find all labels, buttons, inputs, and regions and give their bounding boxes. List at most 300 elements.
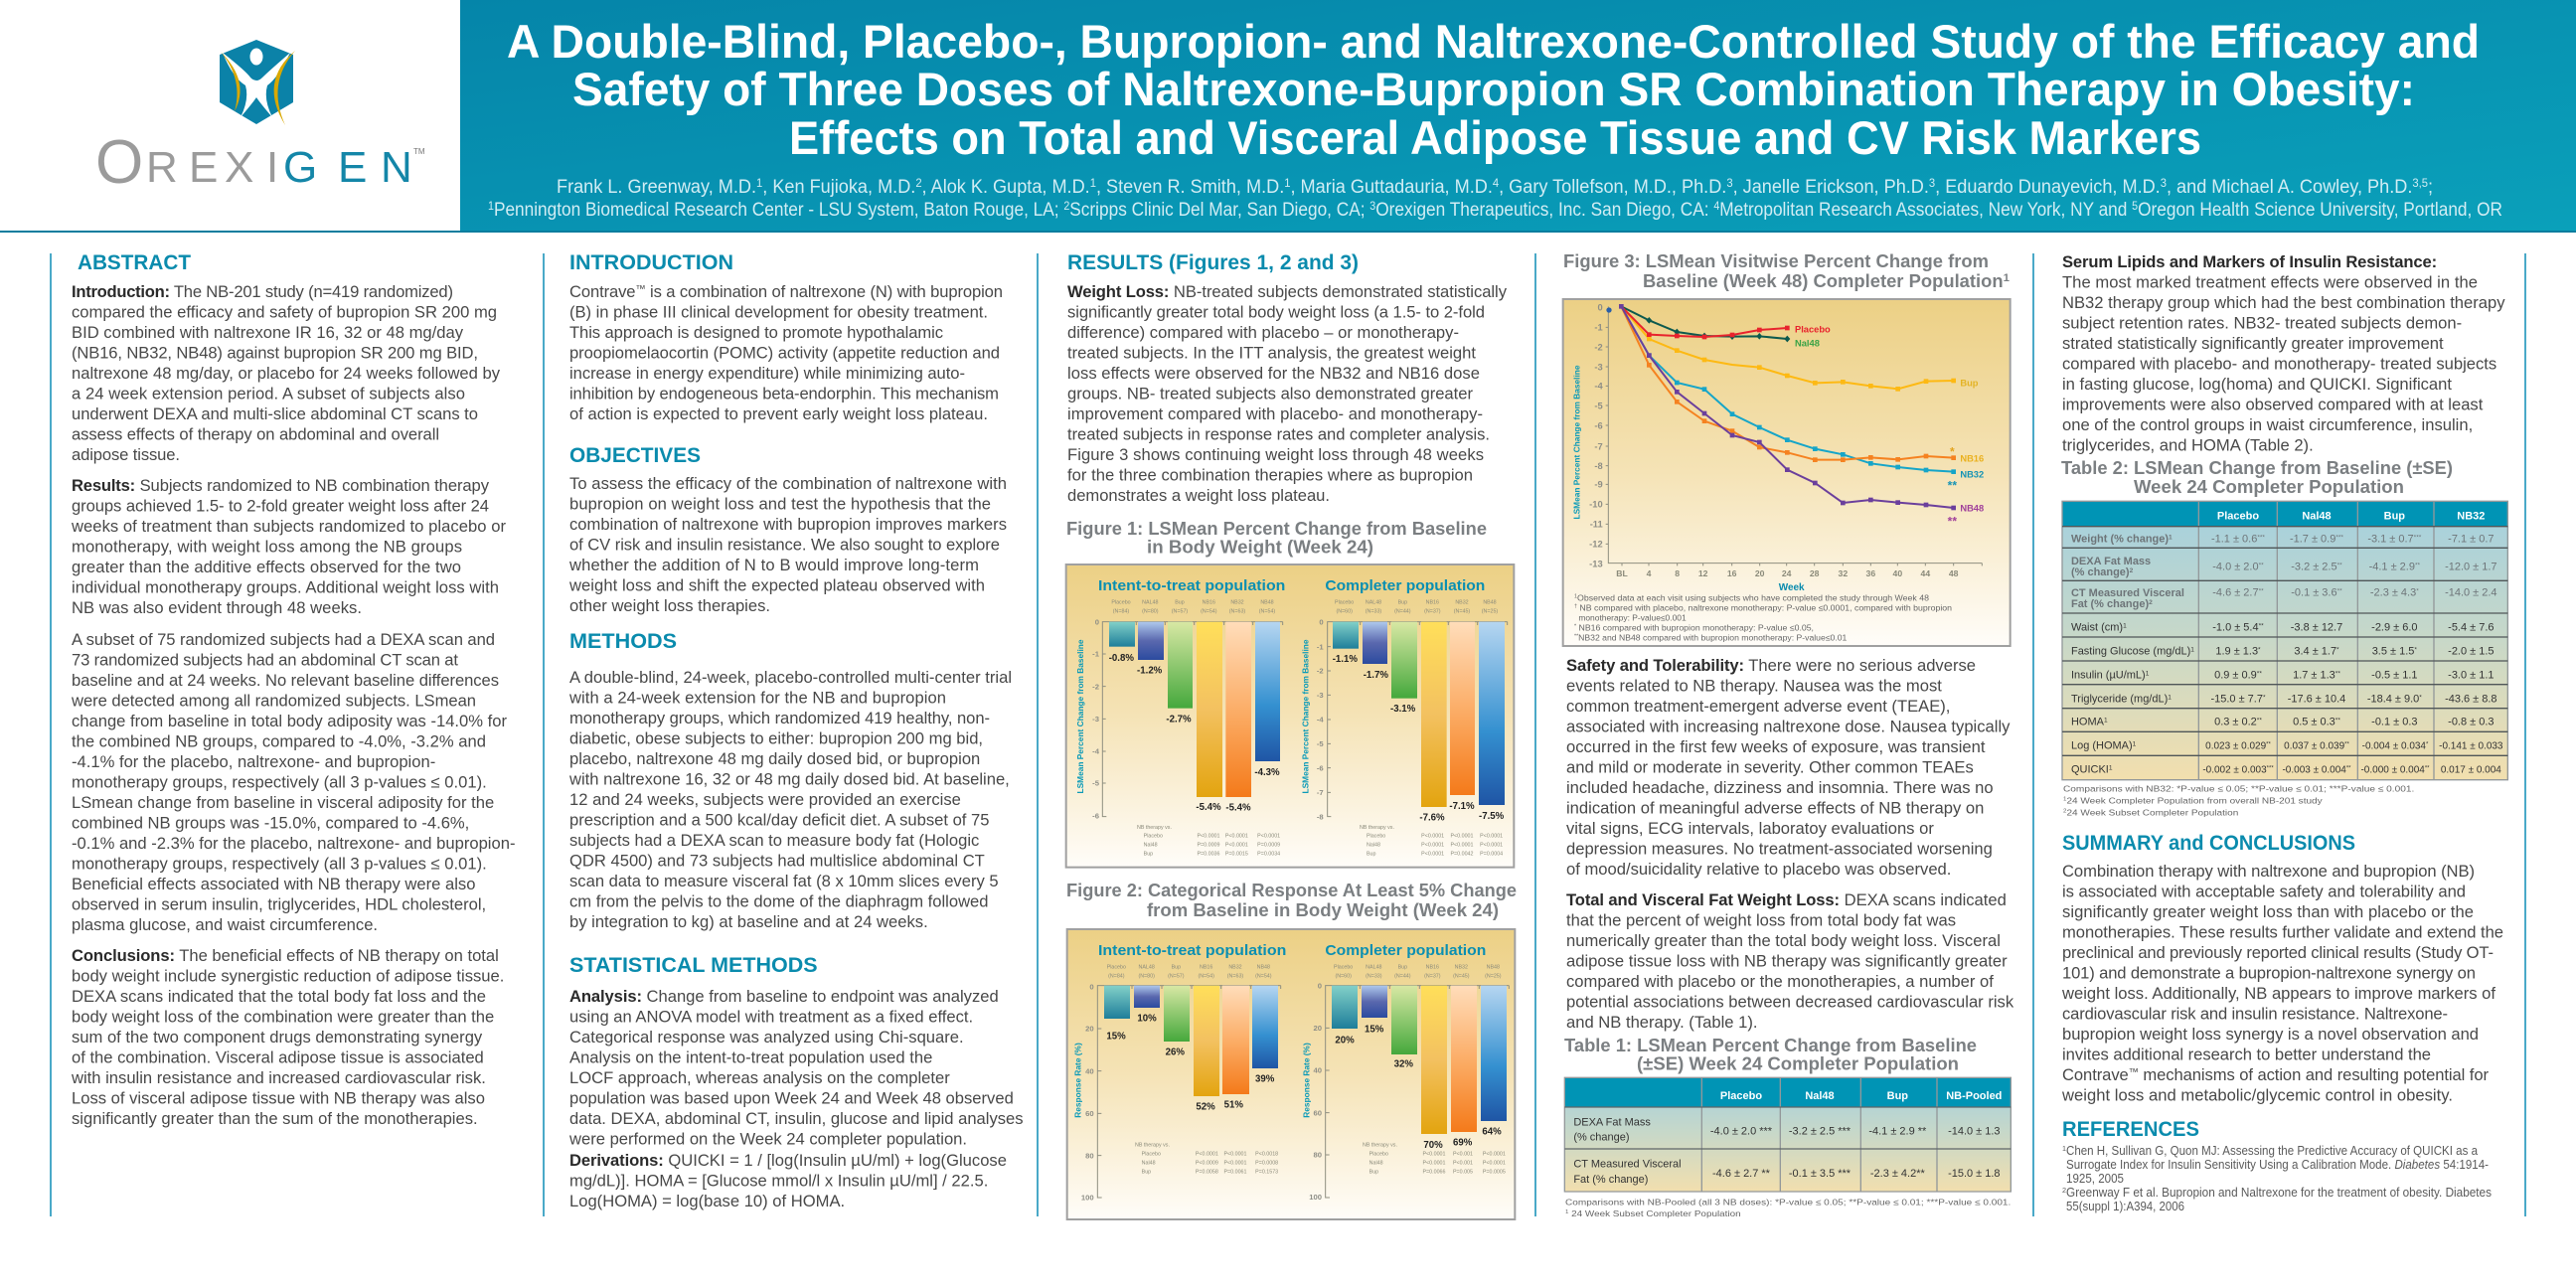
table 1 row: CT: -0.1 ± 3.5 *** — [1789, 1168, 1852, 1180]
bars: completer — [1333, 622, 1505, 807]
text block: abstract conclusions: significantly greater than the sum of the monotherapies. — [72, 1109, 478, 1128]
p values: intent-to-treat — [1137, 825, 1280, 858]
text block: abstract introduction: assess effects of therapy on abdominal and overall — [72, 425, 439, 443]
p values: completer: Placebo — [1369, 1152, 1388, 1158]
text block: summary: invites additional research to better understand the — [2062, 1046, 2431, 1063]
values: intent-to-treat: -4.3% — [1254, 767, 1280, 778]
group labels: intent-to-treat: Bup — [1172, 965, 1181, 971]
text block: safety and tolerability: vital signs, ECG intervals, laboratoy evaluations or — [1566, 819, 1934, 838]
p values: completer: P=0.0042 — [1451, 852, 1474, 858]
p values: completer: P<0.0001 — [1421, 852, 1444, 858]
text block: statistical analysis: Analysis: Change from baseline to endpoint was analyzed — [569, 987, 999, 1006]
table 2 values: -0.000 ± 0.004** — [2360, 764, 2430, 775]
heading: figure 3 — [1563, 251, 2010, 291]
heading: references: REFERENCES — [2062, 1117, 2199, 1141]
footnotes: figure 3: * NB16 compared with bupropion monotherapy: P-value ≤0.05, — [1574, 623, 1814, 633]
axes: 44 — [1921, 568, 1930, 578]
group labels: intent-to-treat: NAL48 — [1142, 600, 1159, 606]
values: intent-to-treat — [1106, 1013, 1275, 1113]
table 2 values: -0.1 ± 3.6** — [2291, 586, 2342, 598]
group labels: completer: (N=44) — [1394, 609, 1411, 615]
line: NB16 — [1621, 306, 1956, 462]
p values: intent-to-treat: P=0.0015 — [1225, 852, 1248, 858]
table 2 values: 0.023 ± 0.029** — [2205, 740, 2271, 751]
series labels: ** — [1948, 479, 1957, 493]
table 2 header: Nal48 — [2302, 511, 2332, 523]
text block: introduction: of action is expected to prevent early weight loss plateau. — [569, 404, 988, 423]
table 2 values: -17.6 ± 10.4 — [2288, 694, 2345, 706]
text block: total and visceral fat: potential associations between decreased cardiovascular risk — [1566, 992, 2014, 1012]
heading: figure 1 — [1066, 519, 1487, 557]
axes — [1571, 303, 1982, 593]
text block: weight loss: for the three combination therapies where as bupropion — [1067, 465, 1473, 485]
axis: completer: -4 — [1317, 716, 1324, 724]
text block: abstract introduction: naltrexone 48 mg/day, or placebo for 24 weeks followed by — [72, 364, 501, 383]
p values: intent-to-treat: NB therapy vs. — [1137, 825, 1172, 831]
table 2 header — [2217, 511, 2485, 523]
axis: completer: 60 — [1313, 1108, 1322, 1117]
values: intent-to-treat: -0.8% — [1109, 653, 1134, 664]
chart: figure 1 bar chart — [1066, 564, 1514, 868]
p values: completer — [1360, 825, 1503, 858]
heading: table 2: Week 24 Completer Population — [2134, 477, 2404, 497]
text block: introduction: inhibition by endogeneous beta-endorphin. This mechanism — [569, 384, 999, 403]
text block: methods: A double-blind, 24-week, placebo-controlled multi-center trial — [569, 668, 1012, 687]
header banner — [0, 0, 2576, 233]
text block: introduction: (B) in phase III clinical development for obesity treatment. — [569, 302, 988, 322]
heading: table 1 — [1564, 1036, 1977, 1073]
table 2 values: 1.7 ± 1.3** — [2293, 669, 2340, 681]
table 2 row labels: QUICKI1 — [2071, 763, 2113, 775]
text block: serum lipids: improvements were also observed compared with at least — [2062, 396, 2484, 413]
values: completer: -1.1% — [1333, 654, 1358, 665]
table 2 row labels: Fat (% change)2 — [2071, 598, 2153, 610]
heading: figure 2: Figure 2: Categorical Response At Least 5% Change — [1066, 881, 1517, 900]
values: completer: 70% — [1423, 1140, 1443, 1151]
axis: completer: 100 — [1309, 1193, 1322, 1202]
axes: -5 — [1594, 401, 1603, 410]
text block: statistical analysis: Analysis on the intent-to-treat population used the — [569, 1047, 932, 1067]
text block: abstract subset results: A subset of 75 randomized subjects had a DEXA scan and — [72, 630, 495, 649]
table 2 header: NB32 — [2457, 511, 2485, 523]
text block: serum lipids: compared with placebo- and monotherapy- treated subjects — [2062, 354, 2496, 374]
values: intent-to-treat: -2.7% — [1166, 715, 1192, 725]
axes: -12 — [1589, 540, 1603, 550]
p values: intent-to-treat: P<0.0018 — [1255, 1152, 1278, 1158]
axis: intent-to-treat — [1075, 618, 1283, 821]
values: completer: -3.1% — [1390, 704, 1416, 715]
table 2 values: 3.4 ± 1.7* — [2294, 645, 2339, 657]
text block: abstract conclusions: Loss of visceral adipose tissue with NB therapy was also — [72, 1089, 485, 1107]
text block: introduction: proopiomelaocortin (POMC) activity (appetite reduction and — [569, 344, 1000, 362]
text block: serum lipids: strated statistically significantly greater improvement — [2062, 334, 2444, 353]
text block: total and visceral fat: compared with placebo or the monotherapies, a number of — [1566, 972, 1994, 991]
p values: intent-to-treat: P<0.0001 — [1225, 834, 1248, 840]
axis: intent-to-treat: 40 — [1085, 1066, 1094, 1075]
group labels: completer: NB48 — [1487, 965, 1500, 971]
group labels: intent-to-treat: (N=80) — [1142, 609, 1159, 615]
heading: summary and conclusions: SUMMARY and CONCLUSIONS — [2062, 831, 2355, 855]
group labels: completer: (N=37) — [1424, 609, 1441, 615]
values: intent-to-treat: 51% — [1224, 1100, 1243, 1111]
axes: -11 — [1590, 520, 1603, 530]
text block: serum lipids: one of the control groups in waist circumference, insulin, — [2062, 415, 2473, 434]
table 1 row: DEXA: (% change) — [1573, 1131, 1630, 1143]
footnotes: table 1: 1 24 Week Subset Completer Population — [1565, 1208, 1741, 1218]
axis: intent-to-treat: -4 — [1092, 747, 1100, 756]
marker: origin — [1606, 307, 1612, 313]
title: Effects on Total and Visceral Adipose Tissue and CV Risk Markers — [789, 111, 2201, 164]
group labels: intent-to-treat — [1111, 600, 1275, 615]
p values: completer: P<0.0001 — [1483, 1161, 1506, 1167]
p values: completer: Placebo — [1367, 834, 1385, 840]
text block: weight loss: groups. NB- treated subjects also demonstrated greater — [1067, 384, 1473, 403]
p values: completer — [1363, 1143, 1506, 1176]
series labels: Placebo — [1795, 324, 1831, 334]
table 2 values: -2.9 ± 6.0 — [2371, 621, 2418, 633]
p values: intent-to-treat: P<0.0001 — [1198, 834, 1220, 840]
values: completer: -1.7% — [1364, 670, 1388, 681]
values: completer — [1333, 654, 1505, 824]
axes: 20 — [1755, 568, 1765, 578]
text block: serum lipids: subject retention rates. NB32- treated subjects demon- — [2062, 314, 2462, 332]
table 2 values: -3.2 ± 2.5** — [2291, 561, 2342, 572]
p values: intent-to-treat: NB therapy vs. — [1135, 1143, 1170, 1149]
text block: statistical analysis: LOCF approach, whereas analysis on the completer — [569, 1068, 950, 1087]
p values: completer: Nal48 — [1369, 1161, 1383, 1167]
group labels: intent-to-treat: (N=54) — [1259, 609, 1275, 615]
table 2 values: -1.7 ± 0.9*** — [2290, 534, 2343, 546]
table 2 values — [2202, 534, 2503, 775]
p values: completer: P<0.0001 — [1423, 1152, 1446, 1158]
p values: completer: P=0.0005 — [1483, 1170, 1506, 1176]
text block: safety and tolerability: depression measures. No treatment-associated worsening — [1566, 839, 1993, 859]
text block: methods: prescription and a 500 kcal/day deficit diet. A subset of 75 — [569, 811, 989, 829]
series labels: NB32 — [1960, 469, 1984, 479]
text block: statistical analysis: data. DEXA, abdominal CT, insulin, glucose and lipid analyses — [569, 1109, 1024, 1128]
axis: intent-to-treat: 100 — [1081, 1194, 1094, 1203]
table 2 values: -14.0 ± 2.4 — [2445, 586, 2497, 598]
affiliations: 1Pennington Biomedical Research Center - LSU System, Baton Rouge, LA; 2Scripps Clinic Del Mar, San Diego, CA; 3Orexigen Therapeutics, Inc. San Diego, CA: 4Metropolitan Research Associates, New York, NY and 5Oregon Health Science University, Portland, OR — [488, 199, 2502, 221]
series labels: NB48 — [1960, 503, 1984, 513]
axis: intent-to-treat: LSMean Percent Change from Baseline — [1075, 639, 1085, 794]
text block: safety and tolerability: events related to NB therapy. Nausea was the most — [1566, 676, 1942, 696]
values: completer: 20% — [1335, 1036, 1355, 1046]
table 1 row: DEXA: -14.0 ± 1.3 — [1948, 1126, 2001, 1138]
p values: completer: P<0.0001 — [1480, 843, 1503, 849]
logo: Orexigen — [95, 40, 425, 197]
text block: abstract conclusions: sum of the two component drugs demonstrating synergy — [72, 1028, 483, 1046]
p values: completer: P=0.005 — [1453, 1170, 1473, 1176]
axis: completer: -5 — [1317, 739, 1324, 748]
heading: figure 3: Baseline (Week 48) Completer Population 1 — [1643, 271, 2010, 291]
p values: intent-to-treat: P<0.0001 — [1224, 1161, 1247, 1167]
authors: Frank L. Greenway, M.D.1, Ken Fujioka, M.D.2, Alok K. Gupta, M.D.1, Steven R. Smith, M.D.1, Maria Guttadauria, M.D.4, Gary Tollefson, M.D., Ph.D.3, Janelle Erickson, Ph.D.3, Eduardo Dunayevich, M.D.3, and Michael A. Cowley, Ph.D.3,5; — [557, 177, 2433, 198]
text block: derivations: mg/dL)]. HOMA = [Glucose mmol/l x Insulin µU/ml] / 22.5. — [569, 1171, 988, 1191]
line: placebo — [1621, 306, 1790, 339]
table 2 row labels — [2071, 534, 2194, 775]
text block: methods: diabetic, obese subjects to either: bupropion 200 mg bid, — [569, 729, 983, 747]
table 2 values: -4.1 ± 2.9** — [2369, 561, 2420, 572]
axis: intent-to-treat: 0 — [1095, 618, 1099, 627]
table 2 row labels: Weight (% change)1 — [2071, 534, 2173, 546]
footnotes: table 2 — [2063, 784, 2414, 818]
group labels: intent-to-treat: (N=57) — [1168, 974, 1185, 980]
table 2 values: -12.0 ± 1.7 — [2445, 561, 2497, 572]
text block: methods: subjects had a DEXA scan to measure body fat (Hologic — [569, 831, 979, 850]
values: intent-to-treat: 26% — [1166, 1047, 1185, 1058]
group labels: completer: (N=25) — [1482, 609, 1498, 615]
line: NB32 — [1621, 306, 1956, 474]
table 2 values: -0.004 ± 0.034* — [2362, 740, 2429, 751]
table 2 values: 0.037 ± 0.039** — [2284, 740, 2349, 751]
axis: completer: -8 — [1317, 812, 1324, 821]
axes: LSMean Percent Change from Baseline — [1571, 365, 1581, 520]
values: completer: -7.5% — [1479, 811, 1505, 822]
table 2 values: -3.8 ± 12.7 — [2291, 621, 2342, 633]
p values: completer: P<0.0001 — [1423, 1161, 1446, 1167]
footnotes: table 2: 124 Week Completer Population from overall NB-201 study — [2063, 796, 2324, 806]
values: completer: 64% — [1482, 1127, 1502, 1138]
p values: intent-to-treat: P=0.0009 — [1257, 843, 1280, 849]
table 2 row labels: CT Measured Visceral — [2071, 587, 2184, 599]
text block: abstract results: groups achieved 1.5- to 2-fold greater weight loss after 24 — [72, 497, 489, 515]
text block: methods: cm from the pelvis to the dome of the diaphragm followed — [569, 892, 989, 910]
group labels: intent-to-treat: NB32 — [1230, 600, 1244, 606]
table 1 header — [1720, 1090, 2002, 1102]
group labels: intent-to-treat: Placebo — [1107, 965, 1126, 971]
text block: introduction: increase in energy expenditure) while minimizing auto- — [569, 364, 965, 383]
text block: statistical analysis: were performed on the Week 24 completer population. — [568, 1129, 967, 1149]
text block: summary: significantly greater weight loss than with placebo or the — [2062, 902, 2474, 921]
panel: results column — [1066, 250, 1517, 1219]
text block: abstract introduction: Introduction: The NB-201 study (n=419 randomized) — [72, 282, 453, 301]
axes: -2 — [1594, 342, 1603, 352]
table 1 header: Bup — [1887, 1090, 1908, 1102]
text block: weight loss: Figure 3 shows continuing weight loss through 48 weeks — [1067, 445, 1484, 464]
text block: abstract subset results: LSmean change from baseline in visceral adiposity for the — [72, 793, 494, 812]
text block: methods: scan data to measure visceral fat (8 x 10mm slices every 5 — [569, 872, 999, 890]
heading: table 1: (±SE) Week 24 Completer Population — [1637, 1053, 1959, 1073]
table 1 row: DEXA: -4.0 ± 2.0 *** — [1710, 1126, 1773, 1138]
axes: 8 — [1675, 568, 1680, 578]
text block: summary: weight loss. Additionally, NB appears to improve markers of — [2061, 984, 2496, 1003]
group labels: intent-to-treat: (N=80) — [1138, 974, 1155, 980]
p values: completer: P<0.001 — [1453, 1152, 1473, 1158]
group labels: intent-to-treat: NAL48 — [1139, 965, 1155, 971]
text block: references: 55(suppl 1):A394, 2006 — [2066, 1200, 2184, 1213]
bars: intent-to-treat — [1104, 986, 1278, 1096]
group labels: completer: NB16 — [1426, 600, 1439, 606]
table 2 values: -1.1 ± 0.6*** — [2211, 534, 2265, 546]
text block: total and visceral fat: numerically greater than the total body weight loss. Visceral — [1566, 931, 2001, 950]
footnotes: table 1: Comparisons with NB-Pooled (all 3 NB doses): *P-value ≤ 0.05; **P-value ≤ 0.01; ***P-value ≤ 0.001. — [1565, 1197, 2011, 1207]
text block: abstract results: weeks of treatment than subjects randomized to placebo or — [71, 517, 506, 536]
p values: completer: Bup — [1367, 852, 1376, 858]
values: completer: 69% — [1453, 1138, 1473, 1149]
chart: figure 2 bar chart — [1067, 929, 1515, 1219]
panel: lipids, table 2 and summary column — [2061, 252, 2507, 1213]
table 1 row: CT — [1573, 1158, 2001, 1186]
axes: -13 — [1589, 560, 1603, 569]
group labels: intent-to-treat: (N=84) — [1113, 609, 1129, 615]
axes: -10 — [1589, 500, 1603, 510]
table 2 row labels: Fasting Glucose (mg/dL)1 — [2071, 645, 2194, 657]
axis: intent-to-treat: 60 — [1085, 1109, 1094, 1118]
footnotes: figure 3: **NB32 and NB48 compared with bupropion monotherapy: P-value≤0.01 — [1574, 633, 1848, 643]
text block: abstract introduction: BID combined with naltrexone IR 16, 32 or 48 mg/day — [72, 323, 464, 342]
text block: statistical analysis: Categorical response was analyzed using Chi-square. — [569, 1028, 964, 1046]
table 2 values: 3.5 ± 1.5* — [2372, 645, 2417, 657]
table 2 values: 0.017 ± 0.004 — [2441, 764, 2501, 775]
p values: intent-to-treat: Placebo — [1142, 1152, 1161, 1158]
p values: intent-to-treat: Nal48 — [1142, 1161, 1156, 1167]
chart heading: intent-to-treat: Intent-to-treat population — [1098, 578, 1285, 594]
p values: intent-to-treat: P<0.0001 — [1196, 1152, 1218, 1158]
p values: intent-to-treat: P=0.1573 — [1255, 1170, 1278, 1176]
values: intent-to-treat: 10% — [1137, 1013, 1157, 1024]
p values: completer: P<0.0001 — [1451, 834, 1474, 840]
text block: safety and tolerability: of mood/suicidality relative to placebo was observed. — [1566, 860, 1951, 879]
text block: abstract subset results: 73 randomized subjects had an abdominal CT scan at — [72, 650, 458, 670]
heading: table 1: Table 1: LSMean Percent Change from Baseline — [1564, 1036, 1977, 1055]
heading: abstract: ABSTRACT — [78, 250, 191, 274]
text block: serum lipids: in fasting glucose, log(homa) and QUICKI. Significant — [2062, 375, 2452, 394]
text block: references: 1925, 2005 — [2066, 1172, 2124, 1186]
text block: abstract conclusions: body weight loss of the combination were greater than the — [72, 1008, 494, 1026]
series labels: NB16 — [1960, 453, 1984, 463]
axis: intent-to-treat: -5 — [1092, 779, 1100, 788]
logo: Orexigen: REXI — [146, 143, 278, 192]
title: A Double-Blind, Placebo-, Bupropion- and Naltrexone-Controlled Study of the Efficacy and — [507, 15, 2480, 68]
text block: summary: bupropion weight loss synergy is a novel observation and — [2062, 1025, 2479, 1044]
text block: weight loss: significantly greater total body weight loss (a 1.5- to 2-fold — [1067, 302, 1485, 322]
axis: completer: -7 — [1317, 788, 1324, 797]
group labels: completer: Placebo — [1334, 965, 1353, 971]
text block: abstract subset results: -0.1% and -2.3% for the placebo, naltrexone- and bupropion- — [72, 834, 515, 853]
group labels: completer: (N=60) — [1336, 609, 1353, 615]
group labels: completer: Bup — [1398, 965, 1407, 971]
table 2 values: -1.0 ± 5.4** — [2212, 621, 2264, 633]
text block: introduction: This approach is designed to promote hypothalamic — [569, 323, 943, 342]
group labels: intent-to-treat: (N=54) — [1255, 974, 1272, 980]
text block: safety and tolerability: indication of meaningful adverse effects of NB therapy on — [1566, 799, 1984, 817]
text block: total and visceral fat: Total and Visceral Fat Weight Loss: DEXA scans indicated — [1566, 890, 2007, 909]
text block: abstract results: greater than the additive effects observed for the two — [72, 558, 461, 576]
p values: completer: P<0.0001 — [1421, 843, 1444, 849]
panel: introduction, objectives and methods column — [568, 250, 1024, 1210]
axes: 16 — [1727, 568, 1737, 578]
group labels: intent-to-treat: NB48 — [1260, 600, 1274, 606]
axis: intent-to-treat: -3 — [1092, 715, 1099, 724]
text block: abstract conclusions: with insulin resistance and increased cardiovascular risk. — [71, 1068, 486, 1087]
axis: completer: -2 — [1317, 667, 1324, 676]
table 2 row labels: HOMA1 — [2071, 716, 2108, 727]
text block: safety and tolerability: occurred in the first few weeks of exposure, was transient — [1566, 737, 1986, 756]
axis: completer: -3 — [1317, 691, 1324, 700]
p values: intent-to-treat: P=0.0034 — [1257, 852, 1280, 858]
group labels: completer: Placebo — [1335, 600, 1354, 606]
heading: table 2: Table 2: LSMean Change from Baseline (±SE) — [2061, 458, 2453, 478]
text block: safety and tolerability: Safety and Tolerability: There were no serious adverse — [1566, 656, 1976, 675]
axis: completer: Response Rate (%) — [1301, 1043, 1311, 1118]
footnotes: table 1 — [1565, 1197, 2011, 1218]
group labels: intent-to-treat: (N=84) — [1108, 974, 1125, 980]
p values: intent-to-treat: P<0.0001 — [1224, 1152, 1247, 1158]
text block: abstract results: monotherapy, with weight loss among the NB groups — [72, 537, 462, 557]
text block: abstract subset results: the combined NB groups, compared to -4.0%, -3.2% and — [72, 731, 486, 751]
chart heading: completer: Completer population — [1325, 578, 1485, 594]
group labels: completer: NB32 — [1455, 600, 1469, 606]
axes: 48 — [1949, 568, 1959, 578]
axes: 12 — [1698, 568, 1708, 578]
table 2 values: -3.1 ± 0.7*** — [2367, 534, 2422, 546]
p values: intent-to-treat: P<0.0001 — [1257, 834, 1280, 840]
text block: abstract results: Results: Subjects randomized to NB combination therapy — [72, 476, 489, 495]
text block: summary: 101) and demonstrate a bupropion-naltrexone synergy on — [2062, 964, 2476, 982]
text block: abstract introduction: (NB16, NB32, NB48) against bupropion SR 200 mg BID, — [72, 344, 478, 362]
bars: completer — [1332, 986, 1507, 1134]
p values: completer: P=0.0066 — [1423, 1170, 1446, 1176]
heading: figure 3: Figure 3: LSMean Visitwise Percent Change from — [1563, 251, 1989, 271]
group labels: intent-to-treat: (N=63) — [1227, 974, 1243, 980]
text block: abstract results: individual monotherapy groups. Additional weight loss with — [72, 578, 499, 596]
text block: objectives: other weight loss therapies. — [569, 596, 770, 615]
p values: completer: P<0.0001 — [1451, 843, 1474, 849]
text block: abstract introduction: underwent DEXA and multi-slice abdominal CT scans to — [72, 404, 478, 423]
axis: completer: -6 — [1317, 763, 1324, 772]
group labels: intent-to-treat: (N=54) — [1198, 974, 1214, 980]
text block: abstract subset results: plasma glucose, and waist circumference. — [72, 915, 378, 934]
values: completer: 32% — [1394, 1058, 1413, 1069]
text block: references: Surrogate Index for Insulin Sensitivity Using a Calibration Mode. Diabetes 54:1914- — [2066, 1158, 2489, 1172]
text block: abstract conclusions: Conclusions: The beneficial effects of NB therapy on total — [72, 946, 499, 965]
table 1 row: DEXA — [1573, 1116, 2001, 1143]
table 2 values: -7.1 ± 0.7 — [2448, 534, 2495, 546]
text block: safety and tolerability: included headache, dizziness and insomnia. There was no — [1566, 778, 1994, 797]
group labels: completer: (N=44) — [1394, 974, 1411, 980]
table 1 row: DEXA: -3.2 ± 2.5 *** — [1789, 1126, 1852, 1138]
table 2 values: -15.0 ± 7.7* — [2210, 694, 2266, 706]
axis: completer: 20 — [1313, 1024, 1322, 1033]
text block: objectives: weight loss and shift the expected plateau observed with — [568, 576, 985, 594]
axes: 36 — [1866, 568, 1875, 578]
group labels: intent-to-treat: NB16 — [1203, 600, 1215, 606]
axis: intent-to-treat: -2 — [1092, 682, 1099, 691]
text block: derivations: Derivations: QUICKI = 1 / [log(Insulin µU/ml) + log(Glucose — [569, 1151, 1007, 1170]
p values: intent-to-treat: Placebo — [1144, 834, 1163, 840]
values: completer — [1335, 1024, 1502, 1151]
text block: serum lipids: Serum Lipids and Markers of Insulin Resistance: — [2062, 252, 2437, 271]
line: NB48 — [1619, 304, 1956, 510]
axis: completer: LSMean Percent Change from Baseline — [1301, 639, 1311, 794]
text block: abstract subset results: monotherapy groups, respectively (all 3 p-values ≤ 0.01). — [72, 855, 487, 873]
table 2 values: 0.5 ± 0.3** — [2293, 716, 2340, 727]
table 1 row: DEXA: -4.1 ± 2.9 ** — [1868, 1126, 1927, 1138]
group labels: completer: (N=33) — [1366, 974, 1382, 980]
footnotes: table 2: 224 Week Subset Completer Population — [2063, 808, 2239, 818]
group labels: completer: (N=33) — [1366, 609, 1381, 615]
text block: summary: cardiovascular risk and insulin resistance. Naltrexone- — [2062, 1004, 2448, 1024]
text block: abstract subset results: combined NB groups was -15.0%, compared to -4.6%, — [72, 813, 469, 833]
line: bupropion — [1621, 306, 1956, 392]
text block: objectives: To assess the efficacy of the combination of naltrexone with — [569, 474, 1007, 493]
heading: methods: METHODS — [569, 629, 677, 653]
text block: abstract conclusions: DEXA scans indicated that the total body fat loss and the — [72, 987, 486, 1006]
heading: figure 2: from Baseline in Body Weight (Week 24) — [1147, 900, 1499, 920]
table 2 row labels: (% change)2 — [2071, 566, 2134, 578]
text block: weight loss: improvement compared with placebo- and monotherapy- — [1067, 404, 1483, 423]
